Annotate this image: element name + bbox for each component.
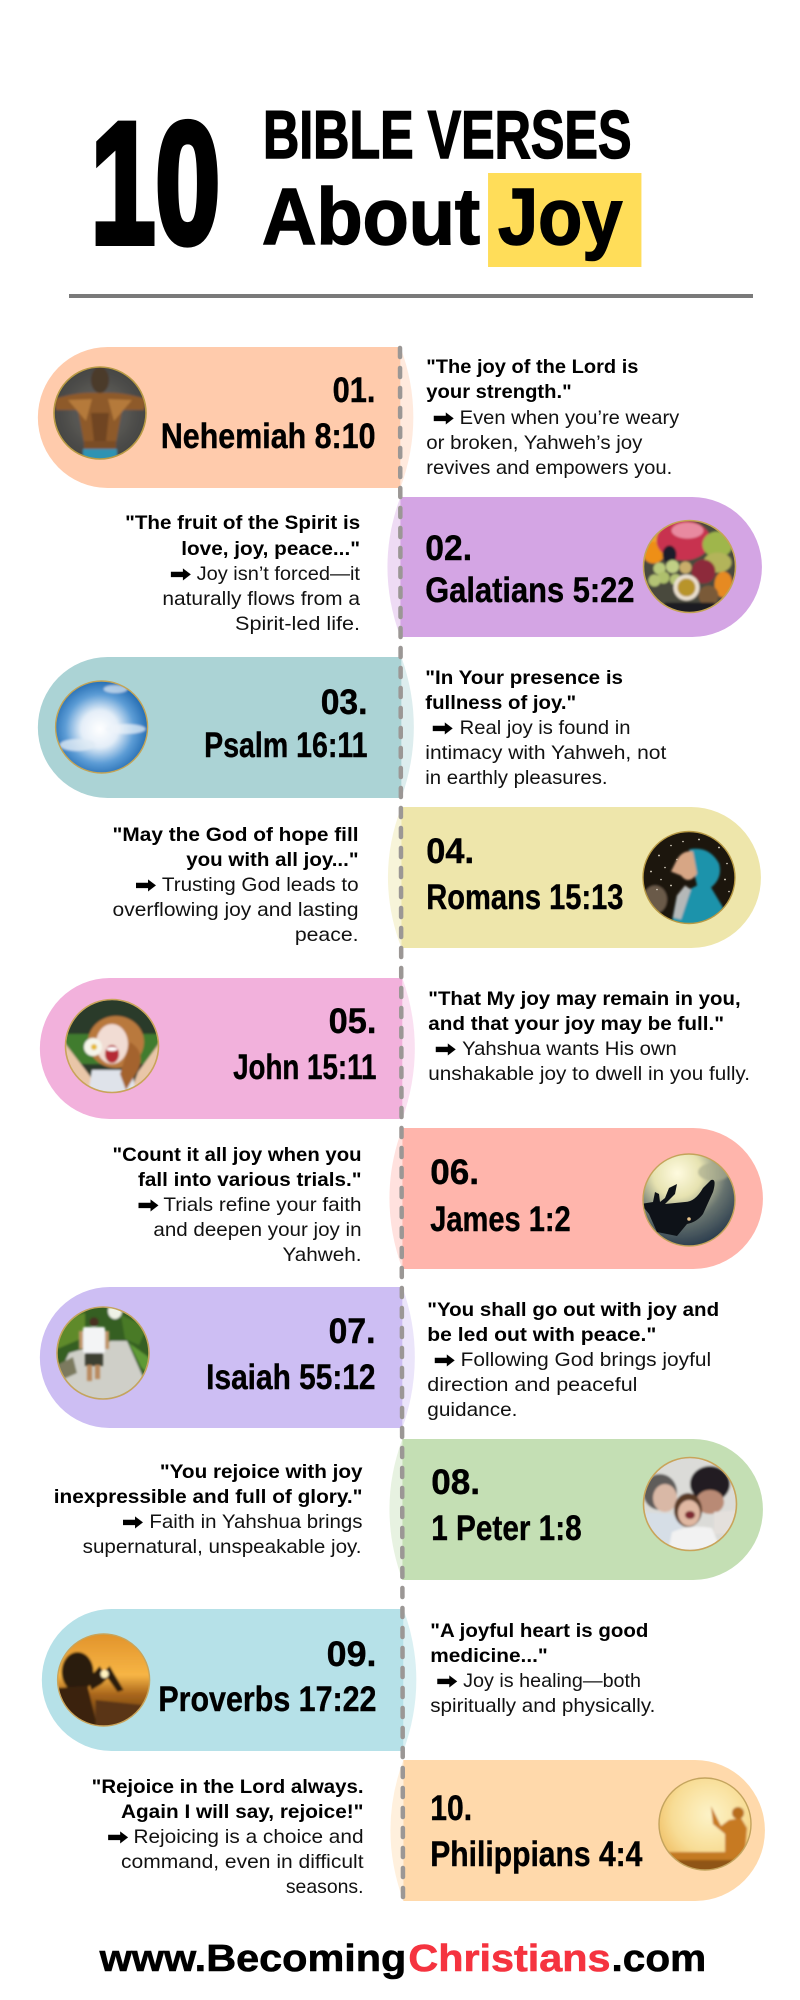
verse text 7: "You shall go out with joy and	[427, 1300, 719, 1321]
verse text 3: fullness of joy."	[425, 693, 576, 714]
pill 10 heading: Philippians 4:4	[430, 1835, 643, 1874]
footer website url	[99, 1938, 706, 1980]
row 1: Nehemiah 8:10	[38, 347, 680, 488]
title line: BIBLE VERSES: BIBLE VERSES	[263, 98, 631, 173]
pill 10 heading	[430, 1789, 643, 1874]
verse text 10: ➡	[108, 1827, 127, 1848]
verse text 8: supernatural, unspeakable joy.	[83, 1537, 362, 1558]
verse text 2	[125, 513, 361, 635]
row 8: 1 Peter 1:8	[54, 1439, 763, 1580]
icon: photo of muscular back	[52, 365, 148, 461]
footer website url: www.Becoming	[99, 1938, 406, 1980]
row 5: John 15:11	[40, 978, 750, 1119]
verse text 9: spiritually and physically.	[430, 1696, 655, 1717]
verse text 4: overflowing joy and lasting	[113, 900, 359, 921]
verse text 4: "May the God of hope fill	[113, 825, 359, 846]
icon: photo of man walking on path	[55, 1303, 151, 1401]
verse text 2: ➡	[170, 564, 190, 585]
verse text 9	[430, 1621, 655, 1717]
pill 4 heading: 04.	[426, 832, 474, 871]
footer website url: Christians	[408, 1938, 611, 1980]
pill 1 heading: 01.	[333, 371, 375, 410]
verse text 1: ➡	[433, 408, 453, 429]
verse text 10: Again I will say, rejoice!"	[121, 1802, 364, 1823]
row 7: Isaiah 55:12	[40, 1287, 719, 1428]
title number 10: 10	[91, 88, 220, 280]
pill 1 heading: Nehemiah 8:10	[161, 417, 375, 456]
pill 2 heading: 02.	[425, 529, 472, 568]
icon: photo of laughing girl	[64, 998, 160, 1094]
verse text 7: Following God brings joyful	[461, 1350, 711, 1371]
verse text 1: "The joy of the Lord is	[426, 357, 638, 378]
verse text 6: "Count it all joy when you	[113, 1145, 362, 1166]
verse text 6	[113, 1145, 362, 1266]
icon: photo of woman in blue hood	[641, 830, 737, 926]
verse text 6: Trials refine your faith	[163, 1195, 362, 1216]
verse text 10	[92, 1777, 364, 1898]
pill 9 heading: 09.	[327, 1635, 376, 1674]
pill 2 heading: Galatians 5:22	[425, 571, 634, 610]
pill 5	[40, 978, 415, 1119]
icon: photo of heart hands at sunset	[56, 1632, 152, 1728]
pill 9 heading: Proverbs 17:22	[158, 1680, 376, 1719]
pill 6	[389, 1128, 763, 1269]
pill 8 heading	[431, 1463, 582, 1548]
pill 3	[38, 657, 414, 798]
row 9: Proverbs 17:22	[42, 1609, 655, 1751]
verse text 8: Faith in Yahshua brings	[149, 1512, 363, 1533]
pill 6 heading	[430, 1153, 571, 1239]
verse text 5	[428, 989, 750, 1085]
verse text 9: Joy is healing—both	[463, 1671, 641, 1692]
pill 9 heading	[158, 1635, 376, 1719]
icon: photo of bright sky	[54, 679, 150, 775]
pill 10	[390, 1760, 765, 1901]
row 6: James 1:2	[113, 1128, 763, 1269]
verse text 5: unshakable joy to dwell in you fully.	[428, 1064, 750, 1085]
pill 6 heading: 06.	[430, 1153, 479, 1192]
verse text 5: Yahshua wants His own	[462, 1039, 677, 1060]
verse text 6: Yahweh.	[282, 1245, 362, 1266]
pill 7 heading	[206, 1312, 375, 1397]
verse text 5: "That My joy may remain in you,	[428, 989, 741, 1010]
pill 1	[38, 347, 413, 488]
verse text 10: Rejoicing is a choice and	[133, 1827, 364, 1848]
verse text 6: ➡	[138, 1195, 158, 1216]
verse text 1	[426, 357, 680, 479]
title word: About: About	[262, 172, 480, 261]
verse text 2: Joy isn’t forced—it	[197, 564, 361, 585]
verse text 10: seasons.	[286, 1877, 364, 1898]
pill 4	[388, 807, 761, 948]
verse text 7	[427, 1300, 719, 1421]
verse text 9: ➡	[437, 1671, 457, 1692]
verse text 1: revives and empowers you.	[426, 458, 672, 479]
pill 1 heading	[161, 371, 375, 456]
pill 10 heading: 10.	[430, 1789, 472, 1828]
pill 8 heading: 08.	[431, 1463, 480, 1502]
row 2: Galatians 5:22	[125, 497, 762, 637]
verse text 7: be led out with peace."	[427, 1325, 656, 1346]
verse text 8: "You rejoice with joy	[160, 1462, 363, 1483]
verse text 9: medicine..."	[430, 1646, 548, 1667]
verse text 3	[425, 668, 667, 789]
verse text 2: Spirit-led life.	[235, 614, 360, 635]
verse text 5: and that your joy may be full."	[428, 1014, 724, 1035]
verse text 3: in earthly pleasures.	[425, 768, 608, 789]
pill 5 heading: John 15:11	[233, 1048, 376, 1087]
icon: photo of fruit	[642, 518, 738, 614]
verse text 1: or broken, Yahweh’s joy	[426, 433, 643, 454]
pill 7 heading: Isaiah 55:12	[206, 1358, 375, 1397]
verse text 4	[113, 825, 359, 946]
icon: photo of person raising arm at sunrise	[657, 1776, 753, 1872]
verse text 3: Real joy is found in	[460, 718, 630, 739]
verse text 8: ➡	[123, 1512, 142, 1533]
verse text 6: fall into various trials."	[138, 1170, 362, 1191]
pill 3 heading	[204, 683, 368, 765]
verse text 5: ➡	[435, 1039, 455, 1060]
verse text 8: inexpressible and full of glory."	[54, 1487, 363, 1508]
verse text 4: peace.	[295, 925, 359, 946]
verse text 2: naturally flows from a	[162, 589, 361, 610]
title highlight: Joy: Joy	[498, 172, 622, 261]
pill 5 heading	[233, 1002, 376, 1087]
icon: photo of raised hand	[641, 1152, 737, 1248]
pill 9	[42, 1609, 416, 1751]
row 4: Romans 15:13	[113, 807, 761, 948]
icon: photo of happy family	[642, 1456, 738, 1552]
verse text 7: ➡	[434, 1350, 454, 1371]
pill 8	[389, 1439, 763, 1580]
verse text 10: command, even in difficult	[121, 1852, 364, 1873]
verse text 8	[54, 1462, 363, 1558]
verse text 4: ➡	[135, 875, 155, 896]
verse text 4: Trusting God leads to	[162, 875, 359, 896]
footer website url: .com	[612, 1938, 706, 1980]
row 10: Philippians 4:4	[92, 1760, 765, 1901]
pill 8 heading: 1 Peter 1:8	[431, 1509, 582, 1548]
pill 3 heading: Psalm 16:11	[204, 726, 368, 765]
pill 4 heading	[426, 832, 623, 917]
row 3: Psalm 16:11	[38, 657, 667, 798]
pill 2 heading	[425, 529, 634, 610]
verse text 9: "A joyful heart is good	[430, 1621, 648, 1642]
pill 6 heading: James 1:2	[430, 1200, 571, 1239]
verse text 4: you with all joy..."	[186, 850, 359, 871]
verse text 3: "In Your presence is	[425, 668, 623, 689]
verse text 2: "The fruit of the Spirit is	[125, 513, 360, 534]
pill 7	[40, 1287, 415, 1428]
verse text 10: "Rejoice in the Lord always.	[92, 1777, 364, 1798]
verse text 1: your strength."	[426, 382, 572, 403]
pill 3 heading: 03.	[321, 683, 368, 722]
pill 7 heading: 07.	[329, 1312, 375, 1351]
verse text 7: guidance.	[427, 1400, 517, 1421]
verse text 6: and deepen your joy in	[153, 1220, 362, 1241]
verse text 3: intimacy with Yahweh, not	[425, 743, 667, 764]
pill 5 heading: 05.	[329, 1002, 376, 1041]
verse text 3: ➡	[432, 718, 452, 739]
title	[91, 88, 641, 280]
verse text 2: love, joy, peace..."	[181, 539, 360, 560]
verse text 1: Even when you’re weary	[460, 408, 680, 429]
verse text 7: direction and peaceful	[427, 1375, 637, 1396]
pill 2	[387, 497, 762, 637]
pill 4 heading: Romans 15:13	[426, 878, 623, 917]
